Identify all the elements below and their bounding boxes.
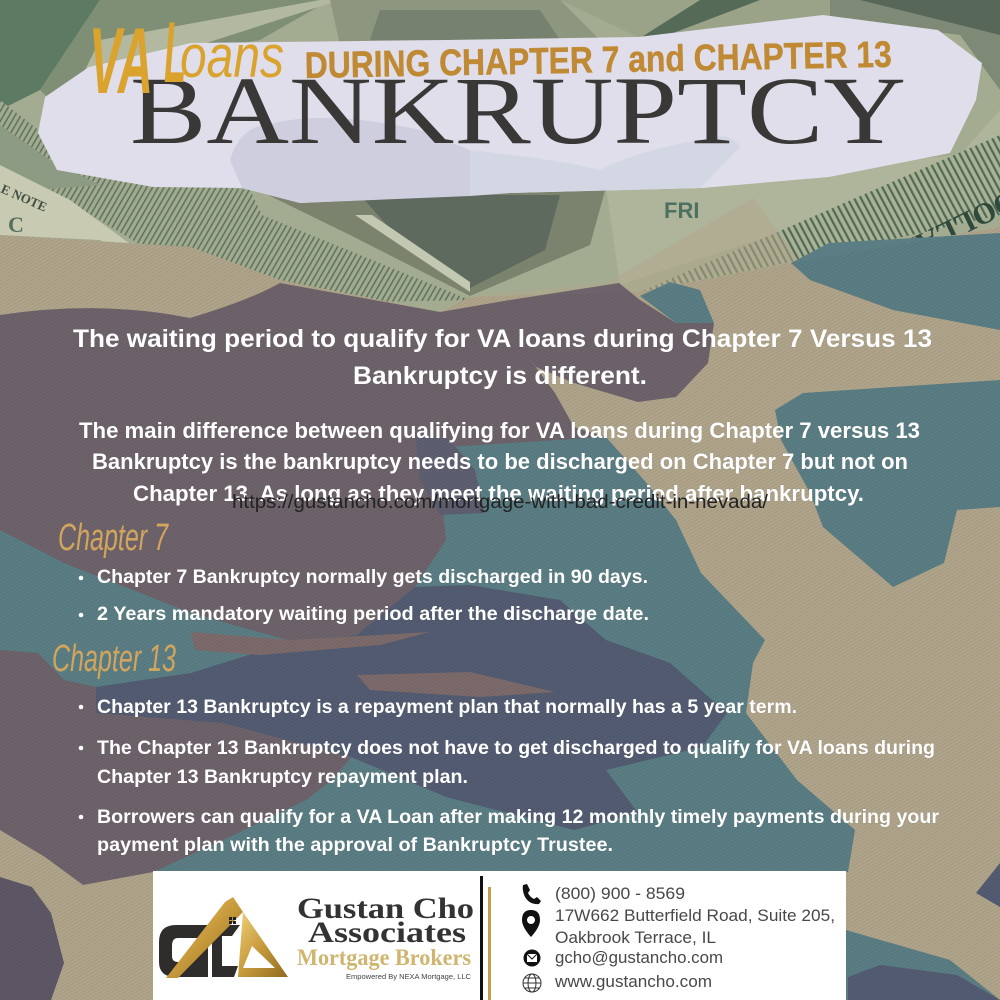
title: va loans (89, 5, 284, 113)
intro paragraph (79, 418, 920, 506)
chapter 13 bullets: payment plan with the approval of Bankruptcy Trustee. (97, 835, 613, 856)
background: money photograph (0, 0, 1000, 320)
contact details (554, 885, 835, 991)
chapter 7 bullets: Chapter 7 Bankruptcy normally gets discharged in 90 days. (97, 567, 648, 588)
icon: email (524, 950, 540, 966)
money text fragments: C (8, 212, 24, 237)
contact details: gcho@gustancho.com (555, 949, 723, 967)
money text fragments: FRI (664, 198, 699, 223)
url overlay: https://gustancho.com/mortgage-with-bad-credit-in-nevada/ (232, 492, 769, 513)
contact details: Oakbrook Terrace, IL (555, 929, 716, 947)
money text fragments: E NOTE (0, 181, 49, 215)
contact details: 17W662 Butterfield Road, Suite 205, (555, 907, 835, 925)
heading: chapter 7: Chapter 7 (58, 517, 169, 559)
intro paragraph: Chapter 13. As long as they meet the waiting period after bankruptcy. (133, 481, 864, 506)
contact details: www.gustancho.com (554, 973, 712, 991)
icon: location pin (522, 910, 540, 937)
contact details: (800) 900 - 8569 (555, 885, 685, 903)
icon: phone (523, 884, 541, 904)
title: during chapter 7 and chapter 13: DURING CHAPTER 7 and CHAPTER 13 (304, 34, 892, 86)
title: bankruptcy: BANKRUPTCY (130, 57, 906, 164)
headline: Bankruptcy is different. (353, 362, 647, 390)
logo: company name: Gustan Cho (297, 892, 474, 925)
headline: The waiting period to qualify for VA loans during Chapter 7 Versus 13 (73, 325, 932, 353)
logo: company name: Empowered By NEXA Mortgage, LLC (346, 972, 472, 981)
title: va loans: oans (180, 23, 284, 90)
chapter 13 bullets: Chapter 13 Bankruptcy is a repayment plan that normally has a 5 year term. (97, 697, 797, 718)
chapter 13 bullets: Borrowers can qualify for a VA Loan after making 12 monthly timely payments during your (97, 807, 940, 828)
intro paragraph: Bankruptcy is the bankruptcy needs to be discharged on Chapter 7 but not on (92, 449, 908, 474)
icon: globe (523, 974, 541, 992)
logo: company name: Mortgage Brokers (297, 945, 471, 970)
chapter 13 bullets (79, 697, 940, 856)
chapter 13 bullets: Chapter 13 Bankruptcy repayment plan. (97, 767, 468, 788)
contact card (153, 871, 846, 1000)
chapter 7 bullets: 2 Years mandatory waiting period after the discharge date. (97, 604, 649, 625)
title: va loans: VA (89, 8, 153, 113)
title: va loans: L (164, 5, 186, 101)
chapter 13 bullets: The Chapter 13 Bankruptcy does not have to get discharged to qualify for VA loans during (97, 738, 935, 759)
torn paper strip (38, 15, 982, 203)
heading: chapter 13: Chapter 13 (52, 638, 176, 680)
logo: company name: Associates (308, 916, 466, 949)
logo: company name (297, 892, 474, 981)
chapter 7 bullets (79, 567, 649, 625)
intro paragraph: The main difference between qualifying for VA loans during Chapter 7 versus 13 (79, 418, 920, 443)
logo: GCA emblem (159, 897, 288, 978)
headline (73, 325, 932, 390)
money text fragments (0, 181, 1000, 277)
divider (480, 876, 491, 1000)
